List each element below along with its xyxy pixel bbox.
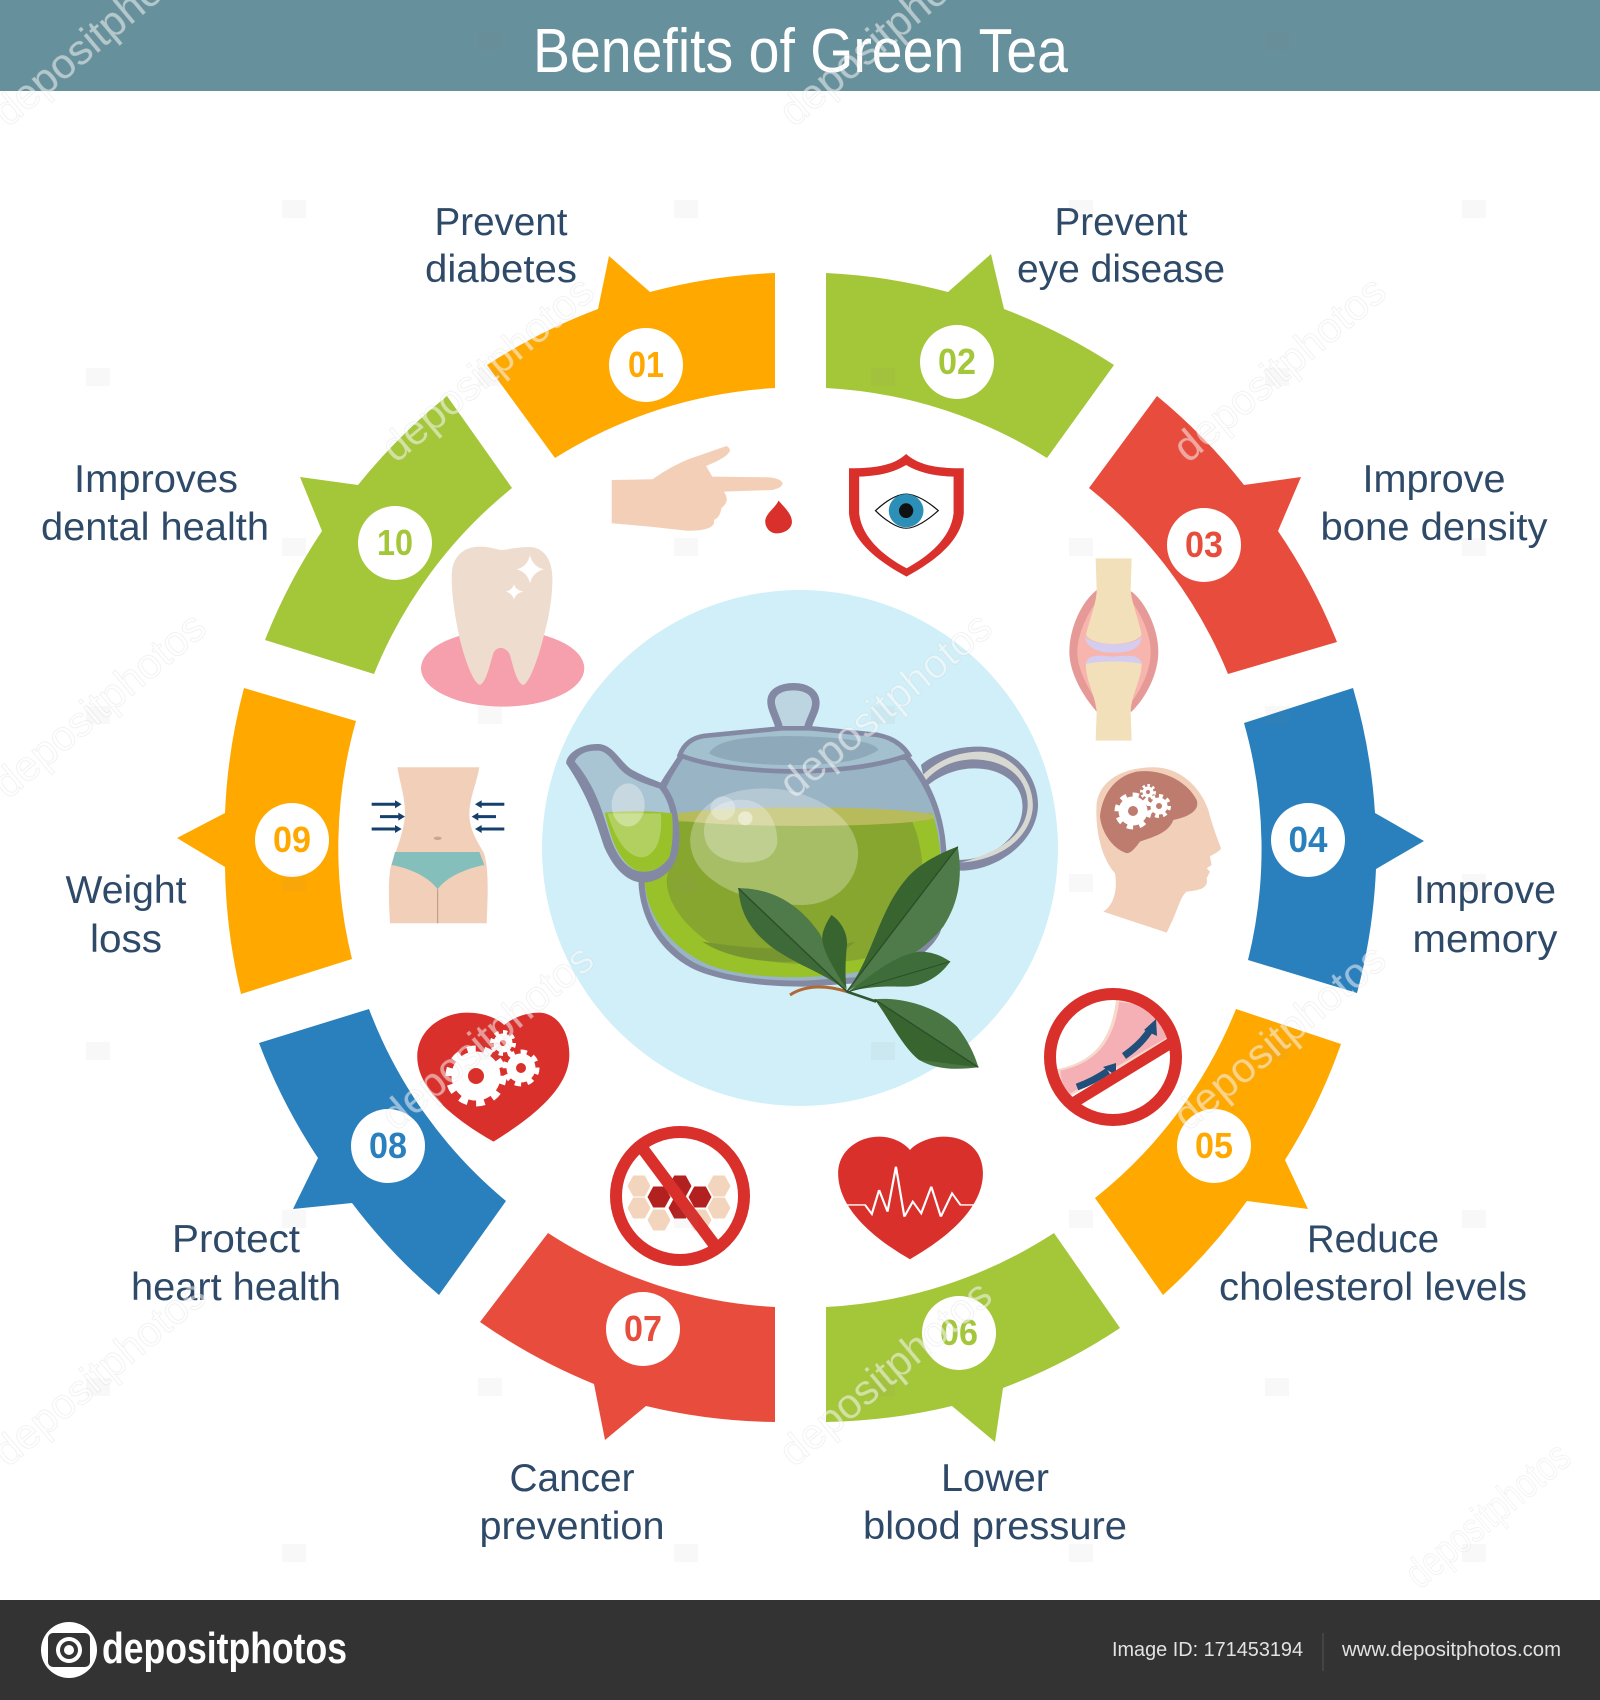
benefit 03: improve bone density <box>1069 396 1548 741</box>
segment 02 <box>826 254 1114 458</box>
label: Lower blood pressure: blood pressure <box>863 1505 1127 1548</box>
central light blue circle <box>542 590 1058 1106</box>
label: Cancer prevention <box>480 1457 664 1548</box>
label: Reduce cholesterol levels <box>1219 1218 1527 1309</box>
benefit 04: improve memory <box>1096 688 1558 993</box>
number badge 06 <box>922 1296 996 1370</box>
watermark: depositphotos <box>1164 934 1394 1139</box>
segment 10 <box>265 396 512 674</box>
glass highlights <box>690 788 858 905</box>
website url: www.depositphotos.com <box>1341 1639 1561 1661</box>
benefit 06: lower blood pressure <box>826 1137 1127 1548</box>
number badge 10 <box>358 506 432 580</box>
icon: artery with prohibition sign <box>1050 994 1176 1120</box>
watermark: depositphotos <box>770 602 1000 807</box>
segment 06 <box>826 1233 1120 1442</box>
handle <box>921 747 1038 871</box>
number badge 05 <box>1177 1109 1251 1183</box>
label: Reduce cholesterol levels: cholesterol levels <box>1219 1266 1527 1309</box>
benefit 08: protect heart health <box>131 1009 569 1309</box>
number badge 04: 04 <box>1288 819 1328 860</box>
label: Improve bone density <box>1320 458 1548 549</box>
watermark: depositphotos <box>770 1270 1000 1475</box>
icon: heart with gears <box>417 1013 569 1142</box>
label: Improve memory: memory <box>1412 918 1558 961</box>
number badge 09: 09 <box>273 819 311 860</box>
number badge 05: 05 <box>1195 1125 1233 1166</box>
number badge 03: 03 <box>1185 524 1223 565</box>
icon: camera logo <box>41 1622 97 1678</box>
title banner <box>0 0 1600 91</box>
number badge 03 <box>1167 508 1241 582</box>
label: Reduce cholesterol levels: Reduce <box>1307 1218 1439 1261</box>
label: Prevent diabetes: Prevent <box>434 201 568 244</box>
number badge 08: 08 <box>369 1125 407 1166</box>
benefit 01: prevent diabetes <box>425 201 792 533</box>
label: Weight loss: Weight <box>66 869 187 912</box>
segment 09 <box>177 688 356 994</box>
label: Prevent eye disease: Prevent <box>1054 201 1188 244</box>
label: Prevent diabetes: diabetes <box>425 248 577 291</box>
icon: cancer cells with prohibition sign <box>616 1132 744 1260</box>
number badge 08 <box>351 1109 425 1183</box>
number badge 07: 07 <box>624 1308 662 1349</box>
icon: head with gears <box>1096 767 1221 933</box>
tea liquid <box>645 807 941 977</box>
benefit 09: weight loss <box>66 688 504 994</box>
segment 03 <box>1089 396 1337 674</box>
label: Improve memory: Improve <box>1414 869 1556 912</box>
segment 05 <box>1095 1009 1341 1295</box>
number badge 04 <box>1271 803 1345 877</box>
label: Prevent eye disease <box>1017 201 1225 291</box>
label: Prevent diabetes <box>425 201 577 291</box>
label: Improves dental health <box>41 458 269 549</box>
label: Protect heart health <box>131 1218 341 1309</box>
number badge 10: 10 <box>377 522 413 563</box>
watermark: depositphotos <box>372 934 602 1139</box>
label: Protect heart health: Protect <box>172 1218 300 1261</box>
footer bar <box>0 1600 1600 1700</box>
benefit 10: improves dental health <box>41 396 584 707</box>
number badge 01 <box>609 328 683 402</box>
footer logo text: depositphotos <box>102 1624 347 1673</box>
segment 04 <box>1244 688 1424 993</box>
number badge 09 <box>255 803 329 877</box>
number badge 02: 02 <box>938 341 976 382</box>
label: Weight loss: loss <box>90 918 162 961</box>
icon: waist with arrows <box>372 767 504 923</box>
label: Protect heart health: heart health <box>131 1266 341 1309</box>
icon: shield with eye <box>849 454 964 577</box>
title: Benefits of Green Tea <box>533 17 1068 86</box>
label: Improve bone density: bone density <box>1320 506 1548 549</box>
icon: heart with pulse <box>838 1137 983 1259</box>
label: Prevent eye disease: eye disease <box>1017 248 1225 291</box>
icon: knee joint <box>1069 558 1158 741</box>
label: Weight loss <box>66 869 187 961</box>
label: Lower blood pressure: Lower <box>941 1457 1049 1500</box>
label: Improve memory <box>1412 869 1558 961</box>
watermark: depositphotos <box>372 266 602 471</box>
label: Improve bone density: Improve <box>1362 458 1506 501</box>
benefit 05: reduce cholesterol levels <box>1050 994 1527 1309</box>
label: Improves dental health: Improves <box>74 458 238 501</box>
number badge 06: 06 <box>940 1312 978 1353</box>
number badge 02 <box>920 325 994 399</box>
benefit 02: prevent eye disease <box>826 201 1225 577</box>
icon: tooth and gum <box>421 547 584 707</box>
number badge 01: 01 <box>628 344 664 385</box>
label: Improves dental health: dental health <box>41 506 269 549</box>
segment 08 <box>259 1009 506 1295</box>
teapot body <box>638 753 948 987</box>
segment 01 <box>487 256 775 458</box>
benefit 07: cancer prevention <box>480 1132 775 1548</box>
segment 07 <box>480 1233 775 1440</box>
number badge 07 <box>606 1292 680 1366</box>
icon: finger with blood drop <box>612 446 792 533</box>
lid <box>680 687 909 771</box>
spout <box>566 744 679 883</box>
watermark: depositphotos <box>1164 266 1394 471</box>
label: Cancer prevention: prevention <box>480 1505 664 1548</box>
image id: Image ID: 171453194 <box>1112 1639 1303 1661</box>
label: Lower blood pressure <box>863 1457 1127 1548</box>
tea leaves <box>738 847 978 1069</box>
label: Cancer prevention: Cancer <box>510 1457 634 1500</box>
teapot illustration <box>566 687 1038 1069</box>
